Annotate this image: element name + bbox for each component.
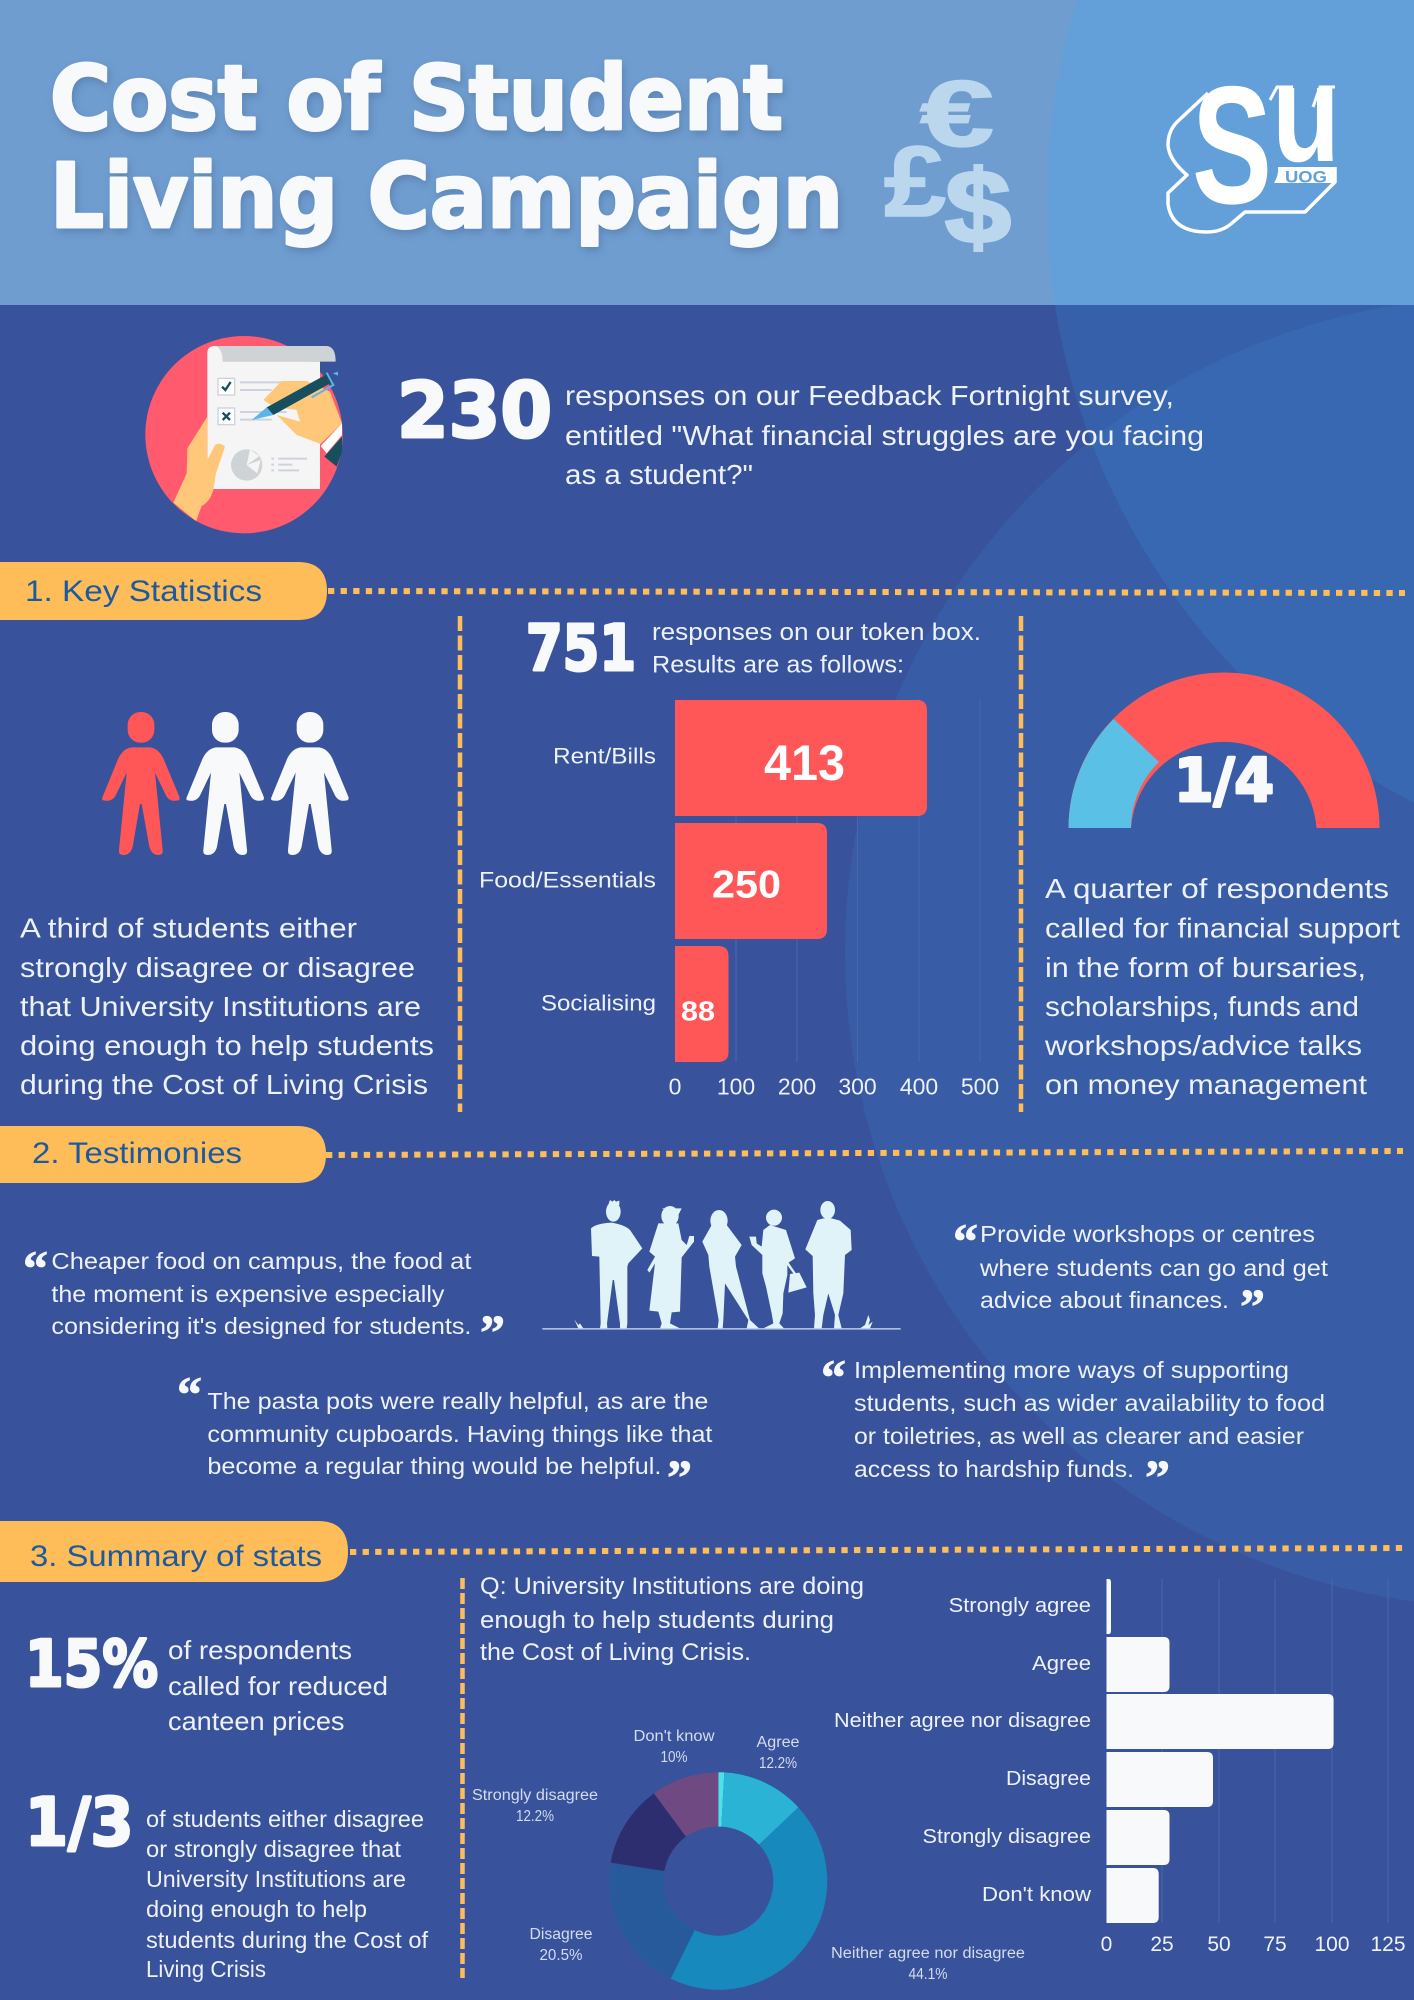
donut chart: 12.2%: [516, 1808, 554, 1825]
text: students disagree: students during the Cost of: [146, 1927, 429, 1953]
text: a quarter of respondents: on money management: [1045, 1069, 1367, 1100]
bar chart: token box results: Socialising: [541, 991, 656, 1016]
bar chart: token box results: 400: [900, 1074, 938, 1100]
icon: currency symbols: $: [945, 150, 1011, 266]
icon: currency symbols: [884, 61, 1011, 266]
testimony: cheaper food: considering it's designed for students.: [51, 1313, 471, 1339]
stat: 15%: 15%: [25, 1628, 158, 1702]
text: a quarter of respondents: A quarter of respondents: [1045, 873, 1389, 904]
text: a third of students: [20, 912, 434, 1100]
testimony: workshops: where students can go and get: [979, 1255, 1328, 1281]
donut chart: 12.2%: [759, 1755, 797, 1772]
icon: survey checklist: [145, 336, 343, 533]
bar: Socialising 88: [675, 946, 728, 1062]
gauge: one quarter: 1/4: [1174, 746, 1274, 816]
icon: three people: [102, 712, 349, 855]
donut chart: [472, 1728, 1025, 1990]
testimony: cheaper food: ”: [480, 1304, 505, 1360]
bar chart: survey responses: Strongly agree: [949, 1594, 1091, 1617]
donut chart: Agree: [756, 1734, 800, 1751]
testimony: pasta pots: community cupboards. Having things like that: [207, 1421, 713, 1447]
testimony: pasta pots: [177, 1366, 713, 1505]
bar chart: survey responses: 75: [1263, 1933, 1287, 1956]
testimony: more ways of supporting: Implementing more ways of supporting: [854, 1357, 1289, 1383]
text: students disagree: or strongly disagree that: [146, 1836, 402, 1862]
bar chart: survey responses: 25: [1150, 1933, 1174, 1956]
heading: 1. Key Statistics: [0, 562, 327, 620]
testimony: more ways of supporting: “: [821, 1349, 846, 1405]
stat: 751: 751: [526, 612, 636, 685]
bar chart: survey responses: Neither agree nor disagree: [834, 1709, 1091, 1732]
testimony: more ways of supporting: access to hardship funds.: [854, 1456, 1134, 1482]
icon: currency symbols: €: [920, 61, 994, 166]
bar chart: token box results: 300: [838, 1074, 877, 1100]
bar chart: token box results: 0: [669, 1074, 681, 1100]
donut chart: Disagree: [530, 1926, 592, 1943]
survey description: [565, 380, 1204, 490]
donut chart: 10%: [660, 1749, 688, 1766]
testimony: cheaper food: Cheaper food on campus, the food at: [51, 1248, 472, 1274]
illustration: group of students: [542, 1200, 901, 1330]
text: students disagree: [146, 1806, 429, 1982]
bar: Food/Essentials 250: [675, 823, 827, 939]
text: a third of students: that University Institutions are: [20, 991, 421, 1022]
text: students disagree: doing enough to help: [146, 1896, 367, 1922]
donut chart: Don't know: [634, 1728, 715, 1745]
token box description: responses on our token box.: [652, 619, 981, 646]
heading: 3. Summary of stats: [0, 1521, 348, 1582]
bar chart: survey responses: Disagree: [1006, 1767, 1091, 1790]
testimony: cheaper food: “: [23, 1240, 48, 1296]
bar chart: survey responses: Agree: [1032, 1652, 1091, 1675]
bar chart: token box results: 200: [778, 1074, 816, 1100]
donut chart: Neither agree nor disagree: [831, 1945, 1025, 1962]
text: a third of students: strongly disagree or disagree: [20, 952, 415, 983]
token box description: [652, 619, 981, 678]
bar chart: token box results: Food/Essentials: [479, 868, 656, 892]
logo: SU UOG: UOG: [1285, 168, 1327, 186]
text: canteen prices: called for reduced: [168, 1671, 388, 1701]
testimony: more ways of supporting: or toiletries, as well as clearer and easier: [854, 1423, 1304, 1449]
bar: Food/Essentials 250: 250: [712, 864, 781, 906]
title: Living Campaign: [50, 144, 843, 248]
icon: currency symbols: £: [884, 126, 946, 238]
bar chart: token box results: 500: [961, 1074, 999, 1100]
text: students disagree: of students either disagree: [146, 1806, 424, 1832]
logo: SU UOG: [1168, 37, 1340, 239]
heading: 1. Key Statistics: 1. Key Statistics: [25, 575, 262, 608]
survey description: entitled "What financial struggles are you facing: [565, 420, 1204, 451]
title: Cost of Student: [50, 46, 783, 150]
heading: 2. Testimonies: 2. Testimonies: [32, 1137, 242, 1170]
token box description: Results are as follows:: [652, 652, 904, 678]
text: a quarter of respondents: called for financial support: [1045, 912, 1400, 944]
bar chart: survey responses: Strongly disagree: [922, 1825, 1091, 1848]
bar chart: token box results: Rent/Bills: [553, 744, 656, 768]
text: canteen prices: canteen prices: [168, 1706, 344, 1736]
testimony: workshops: ”: [1240, 1278, 1265, 1334]
question text: [480, 1573, 864, 1666]
testimony: workshops: advice about finances.: [980, 1287, 1229, 1313]
text: students disagree: University Institutions are: [146, 1866, 406, 1892]
bar chart: survey responses: 0: [1101, 1933, 1112, 1956]
bar chart: survey responses: [834, 1579, 1406, 1956]
testimony: more ways of supporting: ”: [1145, 1449, 1170, 1505]
text: canteen prices: [168, 1635, 388, 1736]
survey description: as a student?": [565, 459, 753, 490]
question text: the Cost of Living Crisis.: [480, 1639, 751, 1666]
bar chart: survey responses: 125: [1370, 1933, 1406, 1956]
bar chart: survey responses: 50: [1207, 1933, 1231, 1956]
donut chart: Strongly disagree: [472, 1787, 598, 1804]
testimony: more ways of supporting: [821, 1349, 1325, 1505]
testimony: cheaper food: [23, 1240, 505, 1360]
testimony: pasta pots: ”: [667, 1449, 692, 1505]
text: a quarter of respondents: in the form of bursaries,: [1045, 952, 1366, 983]
heading: 3. Summary of stats: 3. Summary of stats: [30, 1540, 322, 1573]
question text: Q: University Institutions are doing: [480, 1573, 864, 1600]
testimony: pasta pots: The pasta pots were really helpful, as are the: [207, 1388, 708, 1414]
text: a quarter of respondents: workshops/advice talks: [1044, 1030, 1362, 1061]
testimony: more ways of supporting: students, such as wider availability to food: [854, 1390, 1325, 1416]
gauge: one quarter: [1068, 672, 1380, 828]
testimony: cheaper food: the moment is expensive especially: [51, 1281, 445, 1307]
donut chart: 44.1%: [908, 1966, 948, 1983]
bar chart: token box results: [479, 700, 999, 1100]
text: a quarter of respondents: scholarships, funds and: [1045, 991, 1359, 1022]
logo: SU UOG: S: [1192, 51, 1272, 239]
bar chart: survey responses: 100: [1314, 1933, 1350, 1956]
bar: Rent/Bills 413: [675, 700, 927, 816]
testimony: pasta pots: become a regular thing would be helpful.: [207, 1453, 661, 1479]
survey description: responses on our Feedback Fortnight survey,: [565, 380, 1174, 411]
donut chart: 20.5%: [540, 1947, 583, 1964]
stat: 230: 230: [397, 367, 552, 456]
heading: 2. Testimonies: [0, 1126, 326, 1183]
text: a third of students: doing enough to help students: [20, 1030, 434, 1061]
testimony: workshops: Provide workshops or centres: [980, 1221, 1315, 1247]
text: students disagree: Living Crisis: [146, 1956, 266, 1982]
bar chart: survey responses: Don't know: [982, 1883, 1091, 1906]
bar: Rent/Bills 413: 413: [764, 735, 845, 791]
text: a third of students: during the Cost of Living Crisis: [20, 1069, 428, 1100]
bar: Socialising 88: 88: [681, 996, 715, 1027]
question text: enough to help students during: [480, 1607, 834, 1634]
logo: SU UOG: u: [1272, 37, 1340, 191]
text: canteen prices: of respondents: [168, 1635, 352, 1665]
stat: 1/3: 1/3: [25, 1784, 134, 1861]
title: [50, 46, 843, 248]
text: a quarter of respondents: [1044, 873, 1400, 1100]
testimony: pasta pots: “: [177, 1366, 202, 1422]
testimony: workshops: [953, 1213, 1328, 1334]
bar chart: token box results: 100: [717, 1074, 755, 1100]
text: a third of students: A third of students either: [20, 912, 357, 944]
testimony: workshops: “: [953, 1213, 978, 1269]
